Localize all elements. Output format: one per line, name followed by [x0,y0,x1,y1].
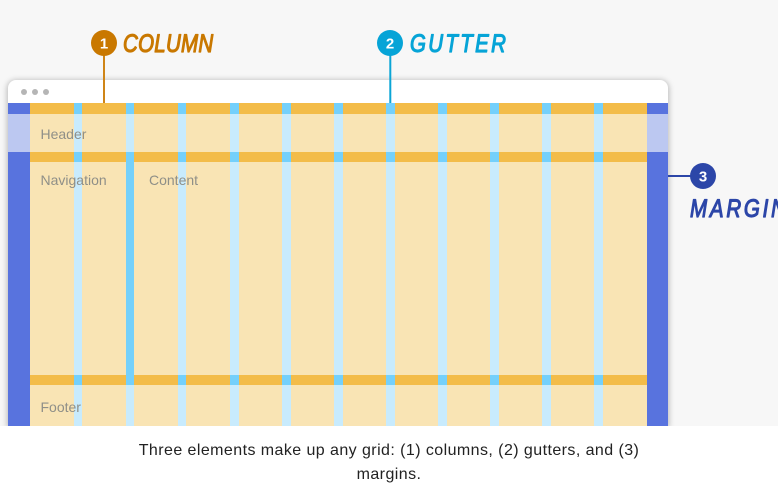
callout 3: margin [668,163,778,222]
right margin [647,103,668,426]
column band middle [30,152,647,162]
caption: Three elements make up any grid: (1) columns, (2) gutters, and (3) margins. [139,442,639,483]
columns background [30,103,647,426]
label: navigation: Navigation [40,172,107,188]
window control dots [21,89,49,95]
label: content: Content [149,172,198,188]
browser window [8,80,668,426]
right margin header tint [647,114,668,152]
callout 1: column: 1 [100,36,108,52]
column band top [30,103,647,114]
left margin header tint [8,114,30,152]
callout 1: column [91,29,214,103]
left margin [8,103,30,426]
callout 2: gutter: 2 [386,36,394,52]
callout 1: column: COLUMN [123,29,214,57]
callout 3: margin: 3 [699,168,707,186]
column band bottom [30,375,647,385]
label: footer: Footer [40,399,81,415]
callout 2: gutter: GUTTER [410,29,506,57]
label: header: Header [40,126,86,142]
callout 2: gutter [377,29,506,103]
